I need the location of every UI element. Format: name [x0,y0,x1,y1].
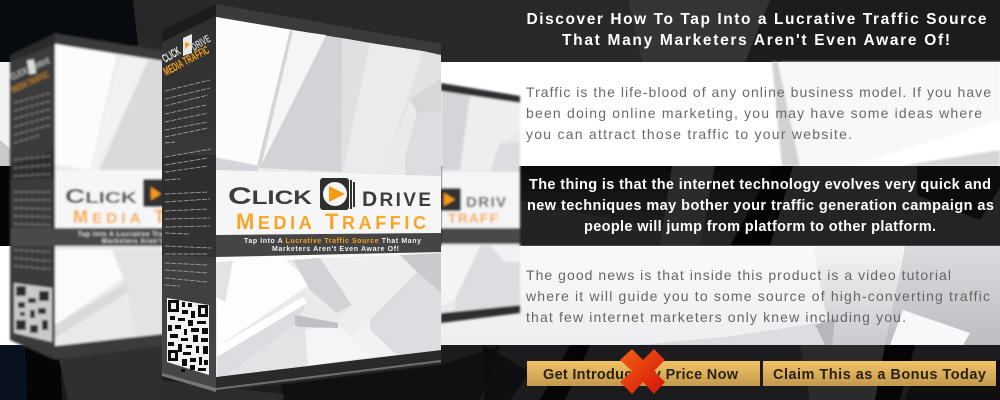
spine logo: MEDIA TRAFFIC [161,43,212,79]
logo: CLICK: C LICK [228,183,312,210]
heading: Discover How To Tap Into a Lucrative Traffic Source [526,11,987,28]
button: claim bonus [763,361,996,386]
text block: good news: that few internet marketers only knew including you. [526,309,906,325]
box tagline: Tap Into A Lucrative Traffic Source That Many [244,238,421,245]
text block: good news: where it will guide you to some source of high-converting traffic [525,288,990,304]
product box: blurred left copy: Marketers Aren't [102,239,162,245]
box tagline [244,238,421,253]
logo: Media Traffic: MEDIA TRAFFIC [236,209,426,234]
spine logo [160,33,213,79]
spine logo: DRIVE [190,33,213,54]
icon: red cross [620,349,665,394]
background: dark faceted bottom [0,345,1000,400]
text block: traffic intro: been doing online marketing, you may have some ideas where [526,105,982,121]
text block: technology statement: new techniques may bother your traffic generation campaign as [527,198,994,214]
text block: good news: The good news is that inside this product is a video tutorial [526,267,951,283]
product box: blurred left copy: MEDIA TRAFFIC [10,69,51,95]
product box: blurred left copy: C LICK [65,186,138,208]
button: get introductory price: Get Introductory Price Now [543,367,739,383]
product box: blurred left copy [9,33,170,360]
text block: technology statement [527,177,994,235]
icon: play logo [320,178,355,210]
heading: That Many Marketers Aren't Even Aware Of! [562,32,950,49]
product box: blurred right copy: DRIV [466,194,506,211]
box front cover art [216,17,441,377]
product box: main [160,4,441,392]
logo: DRIVE: DRIVE [362,188,431,211]
background: dark faceted top [0,0,1000,62]
left box spine [10,33,55,360]
product box: blurred right copy [441,83,520,323]
text block: traffic intro: Traffic is the life-blood of any online business model. If you have [526,84,991,100]
heading [526,11,987,49]
panel: dark technology band [520,166,1000,246]
text block: technology statement: The thing is that the internet technology evolves very quick and [529,177,991,193]
text block: good news [525,267,990,325]
left box spine text [14,93,50,269]
box front top edge [216,4,441,56]
box spine [162,4,216,392]
spine text lines [165,80,211,286]
product box: blurred left copy: CLICK [9,65,30,82]
product box: blurred left copy: DRIVE [33,56,52,71]
text block: traffic intro [526,84,991,142]
text block: technology statement: people will jump from platform to other platform. [584,219,936,235]
left box QR [14,283,52,342]
product box: blurred left copy: M EDIA T [73,207,165,227]
product box: blurred right copy: TRAFF [448,210,498,226]
background: left light and dark bands [0,62,60,345]
box tagline: Marketers Aren't Even Aware Of! [272,246,399,253]
icon: QR code [167,298,209,375]
spine logo: CLICK [160,44,183,66]
button: claim bonus: Claim This as a Bonus Today [773,367,986,383]
left box front [55,33,170,360]
button: get introductory price [527,361,760,386]
box front bottom edge [216,350,441,392]
panel: white traffic intro band [441,62,1000,166]
product box: blurred left copy: Tap Into A Lucrative Tra [78,232,164,238]
box title band [216,233,441,257]
text block: traffic intro: you can attract those traffic to your website. [526,126,852,142]
panel: light good news band [441,246,1000,345]
